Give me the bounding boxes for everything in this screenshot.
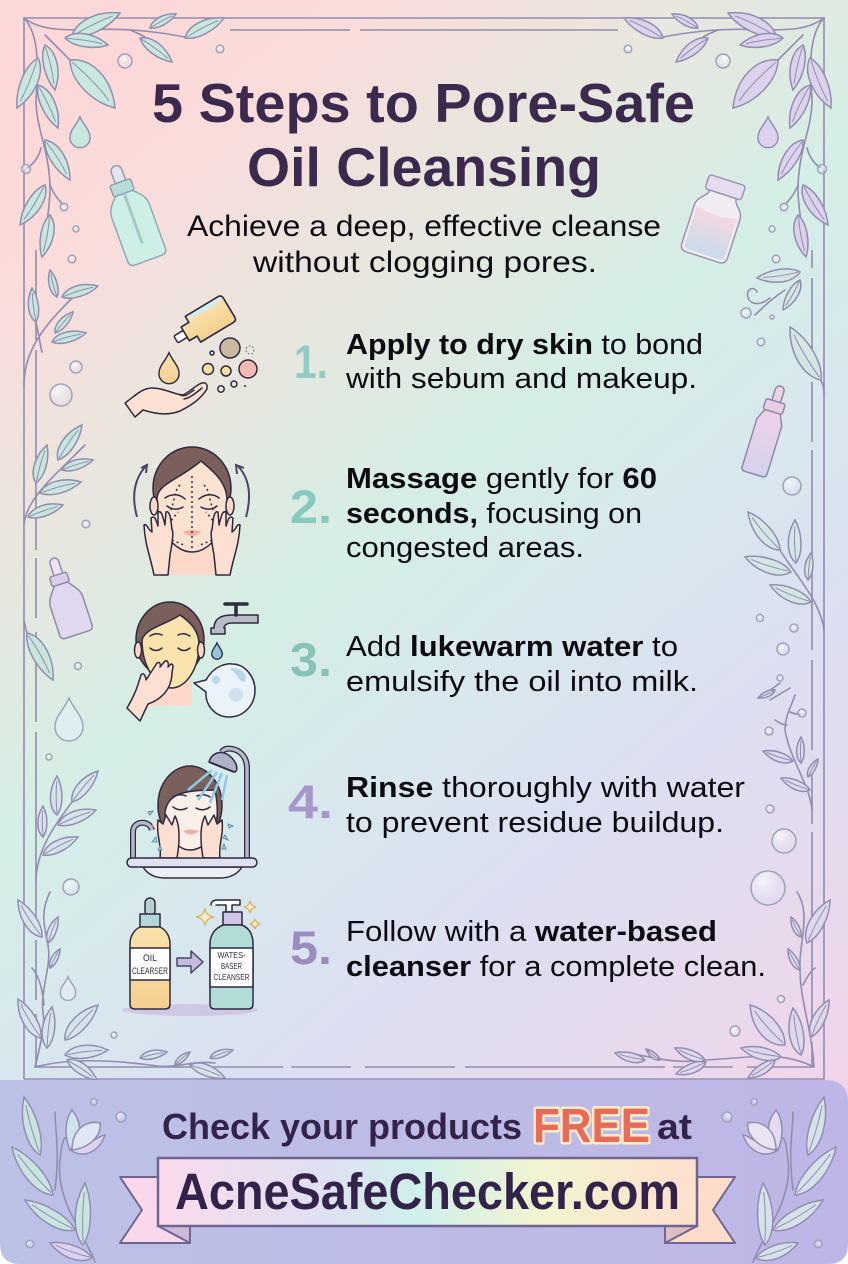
step 1 text [345,329,703,395]
footer botanical right [722,1095,843,1264]
step 2 text: congested areas. [346,532,584,564]
icon: step 5 oil cleanser to water-based cleanser: CLEANSER [214,972,250,982]
step 5 text [346,916,766,983]
number 2: 2. [290,480,332,533]
step 1 text: with sebum and makeup. [345,363,697,395]
website address: AcneSafeChecker.com [175,1163,680,1220]
title: Oil Cleansing [247,136,601,198]
icon: step 5 oil cleanser to water-based cleanser: BASER [221,961,242,971]
step 2 text: seconds, focusing on [346,498,642,530]
subtitle [187,210,661,279]
footer call to action line [162,1100,692,1153]
step 1 text: Apply to dry skin to bond [346,329,703,361]
step 2 text [346,463,657,564]
botanical: lower-left vines [11,698,234,1084]
number 4: 4. [288,775,333,828]
step 3 text [346,631,698,698]
subtitle: without clogging pores. [252,246,597,279]
subtitle: Achieve a deep, effective cleanse [187,210,661,243]
icon: pink dropper bottle right [741,382,793,478]
step 5 text: Follow with a water-based [346,916,717,948]
footer call to action line: at [657,1106,692,1147]
icon: step 5 oil cleanser to water-based cleanser: OIL [143,953,157,963]
icon: step 4 shower rinse at sink [127,749,257,878]
icon: step 2 face massage with arrows [134,447,249,575]
decorative frame [24,18,824,1079]
footer panel [0,1080,848,1264]
icon: step 5 oil cleanser to water-based cleanser [122,898,260,1016]
footer call to action line: Check your products [162,1106,522,1147]
number 5: 5. [290,921,332,974]
number 3: 3. [290,633,332,686]
botanical: lower-right vines [614,683,835,1083]
icon: step 1 oil bottle dropping onto hand [125,295,257,417]
icon: step 5 oil cleanser to water-based cleanser: WATES- [218,950,246,960]
step 4 text: Rinse thoroughly with water [346,772,745,804]
step 4 text [346,772,745,839]
step 3 text: emulsify the oil into milk. [346,666,698,698]
icon: step 5 oil cleanser to water-based cleanser: CLEARSER [132,966,168,976]
step 4 text: to prevent residue buildup. [346,807,724,839]
step 2 text: Massage gently for 60 [346,463,657,495]
botanical: top-right corner [621,5,837,263]
icon: mint dropper bottle top left [95,159,167,267]
icon: lilac dropper bottle left [36,553,93,640]
ribbon banner [120,1158,735,1243]
botanical: top-left corner [11,5,227,263]
icon: step 3 face rinsing with tap and emulsion bubble [127,602,258,721]
number 1: 1. [294,335,328,388]
title: 5 Steps to Pore-Safe [152,72,695,134]
icon: pastel bottle top right [680,173,750,265]
footer call to action line: FREE [533,1100,650,1153]
botanical: right side vines [741,267,828,681]
footer botanical left [5,1095,126,1264]
step 3 text: Add lukewarm water to [346,631,678,663]
step 5 text: cleanser for a complete clean. [346,951,766,983]
title [152,72,695,198]
botanical: left side vines [21,269,99,683]
